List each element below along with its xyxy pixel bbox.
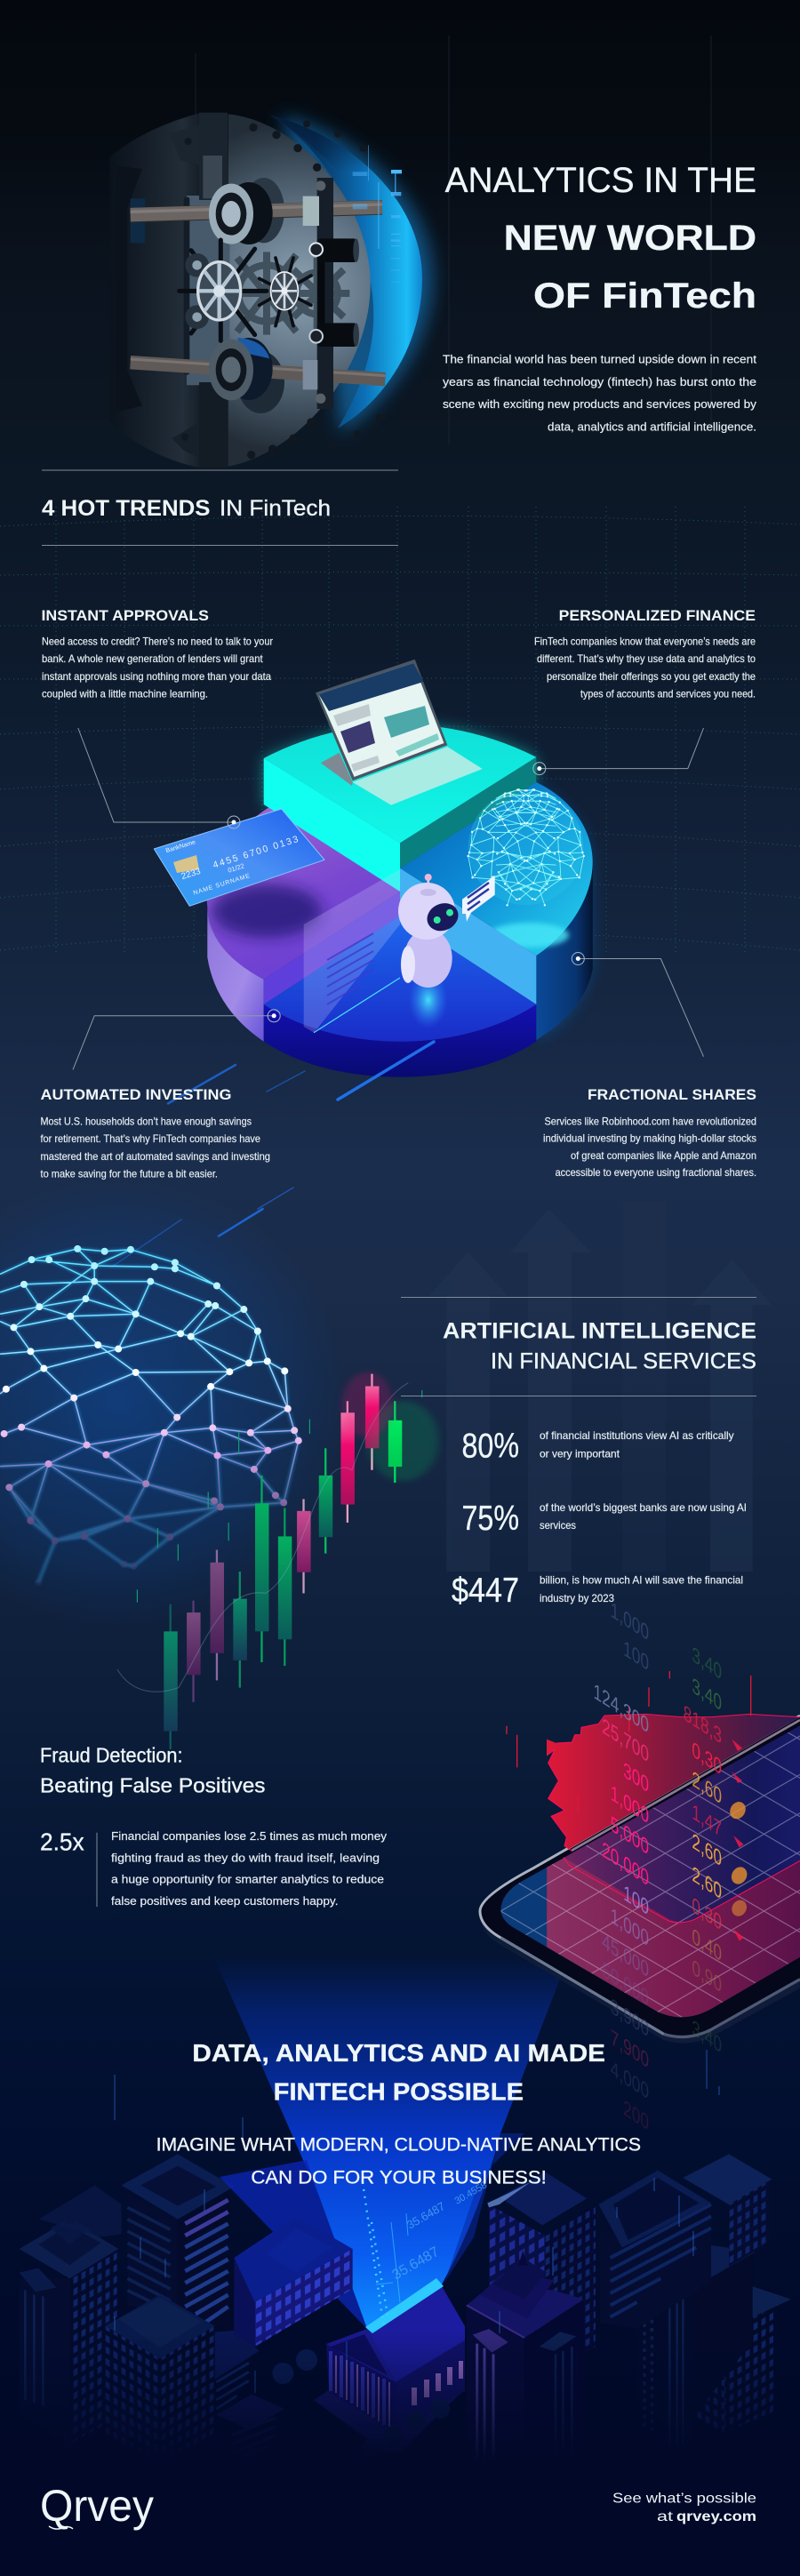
- heading: 4 hot trends: [42, 469, 398, 546]
- callout: personalized finance: [533, 728, 704, 775]
- floating beam figures: 35.6487: [404, 2199, 447, 2232]
- stat: 80%: of financial institutions view AI as critically: [540, 1429, 734, 1442]
- blue floor segment: [264, 916, 536, 1077]
- chart: candlesticks: [117, 1372, 439, 1749]
- icon: tablet: [316, 660, 483, 805]
- heading: artificial intelligence: IN FINANCIAL SERVICES: [491, 1349, 756, 1374]
- market numbers: 3,900: [611, 1993, 649, 2042]
- text block: personalized finance: [534, 607, 756, 700]
- icon: chat bubble: [462, 876, 495, 922]
- callout: instant approvals: [78, 728, 240, 828]
- footer call to action: See what’s possible: [612, 2491, 756, 2506]
- wedge of light: [220, 2160, 367, 2329]
- logo: Qrvey: Qrvey: [40, 2481, 154, 2531]
- text block: automated investing: for retirement. That’s why FinTech companies have: [41, 1132, 260, 1145]
- stat: $447: industry by 2023: [540, 1592, 614, 1604]
- closing headline: DATA, ANALYTICS AND AI MADE: [192, 2039, 605, 2067]
- stat: 75%: 75%: [462, 1500, 519, 1538]
- market numbers: 0,90: [692, 1955, 722, 1997]
- translucent panel: [304, 869, 400, 1033]
- candle 3: [210, 1550, 224, 1680]
- market numbers: 1,000: [611, 1902, 649, 1951]
- candle 4: [233, 1572, 247, 1688]
- market numbers: 3,40: [692, 2015, 722, 2058]
- stat: $447: $447: [452, 1572, 519, 1610]
- trees: [272, 2349, 402, 2459]
- candle 2: [187, 1601, 201, 1702]
- title: NEW WORLD: [504, 219, 756, 258]
- text block: personalized finance: PERSONALIZED FINANCE: [559, 607, 756, 624]
- market numbers: [594, 1596, 722, 2135]
- market numbers: 45,000: [602, 1928, 649, 1982]
- heading: 4 hot trends: 4 HOT TRENDS: [42, 496, 210, 521]
- candle 5: [255, 1476, 268, 1662]
- card text: [165, 834, 300, 897]
- market numbers: 5,000: [611, 1811, 649, 1860]
- bank: [314, 2278, 465, 2453]
- text block: fractional shares: Services like Robinhood.com have revolutionized: [544, 1115, 756, 1127]
- phone body: [482, 1723, 800, 2043]
- text block: instant approvals: Need access to credit? There’s no need to talk to your: [42, 635, 273, 647]
- stat: 80%: 80%: [462, 1428, 519, 1465]
- text block: automated investing: AUTOMATED INVESTING: [41, 1086, 231, 1103]
- buildings left: [20, 2154, 402, 2465]
- stat: 2.5x: Financial companies lose 2.5 times as much money: [111, 1829, 388, 1843]
- stat: 2.5x: a huge opportunity for smarter analytics to reduce: [111, 1873, 384, 1886]
- buildings right: [467, 2154, 791, 2483]
- intro paragraph: years as financial technology (fintech) has burst onto the: [443, 375, 756, 388]
- heading: artificial intelligence: ARTIFICIAL INTELLIGENCE: [443, 1319, 756, 1344]
- text block: automated investing: mastered the art of automated savings and investing: [41, 1150, 270, 1163]
- illustration: bank vault door: [109, 113, 433, 468]
- illustration: light beam: [213, 1956, 569, 2329]
- icon: data sphere: [468, 789, 584, 905]
- red data panel: [547, 1714, 800, 1849]
- footer call to action: [612, 2491, 756, 2524]
- intro paragraph: data, analytics and artificial intelligence.: [548, 420, 756, 434]
- stat: $447: billion, is how much AI will save the financial: [540, 1573, 743, 1586]
- floating beam figures: 35.6487: [389, 2244, 442, 2283]
- icon: credit card: [154, 809, 324, 906]
- text block: fractional shares: of great companies like Apple and Amazon: [571, 1149, 756, 1162]
- market numbers: 7,900: [611, 2024, 649, 2073]
- text block: instant approvals: INSTANT APPROVALS: [41, 607, 209, 624]
- stat: 2.5x: [40, 1828, 388, 1908]
- decorative arrows background: [428, 1202, 772, 1572]
- market numbers: 0,30: [692, 1892, 722, 1935]
- card text: 01/22: [227, 861, 245, 875]
- cyan segment: [400, 782, 593, 1040]
- stat: 80%: or very important: [540, 1447, 620, 1460]
- illustration: segmented isometric cylinder: [154, 660, 593, 1077]
- text block: personalized finance: personalize their offerings so you get exactly the: [547, 670, 756, 683]
- floating beam figures: [389, 2180, 489, 2283]
- text block: fractional shares: accessible to everyone using fractional shares.: [556, 1166, 756, 1179]
- title: OF FinTech: [533, 276, 756, 316]
- title: ANALYTICS IN THE: [445, 161, 756, 200]
- card text: 4455 6700 0133: [212, 834, 300, 871]
- market numbers: 1,000: [611, 1780, 649, 1828]
- market numbers: 818,3: [684, 1700, 722, 1748]
- candle 1: [164, 1604, 178, 1749]
- stat: $447: [452, 1572, 743, 1610]
- closing subheading: IMAGINE WHAT MODERN, CLOUD-NATIVE ANALYTICS: [156, 2135, 641, 2155]
- market numbers: 25,700: [602, 1713, 649, 1767]
- market numbers: 2,60: [692, 1766, 722, 1809]
- callout: fractional shares: [572, 953, 704, 1057]
- floating beam figures: 30.4558: [453, 2180, 489, 2207]
- closing subheading: CAN DO FOR YOUR BUSINESS!: [251, 2167, 547, 2188]
- intro paragraph: [443, 352, 757, 434]
- market numbers: 1,47: [692, 1799, 722, 1842]
- illustration: isometric city with bank: [0, 2039, 800, 2576]
- text block: automated investing: Most U.S. households don’t have enough savings: [41, 1115, 252, 1127]
- card text: 2233: [180, 867, 203, 882]
- blue streaks: [112, 1042, 434, 1267]
- footer call to action: qrvey.com: [676, 2509, 756, 2524]
- illustration: phone with market data: [478, 1604, 800, 2129]
- text block: personalized finance: types of accounts and services you need.: [580, 688, 756, 700]
- card text: NAME SURNAME: [193, 873, 251, 897]
- text block: automated investing: to make saving for the future a bit easier.: [41, 1168, 218, 1180]
- text block: personalized finance: FinTech companies know that everyone’s needs are: [534, 635, 756, 647]
- market numbers: 4,000: [611, 2055, 649, 2104]
- purple segment: [207, 807, 400, 1042]
- heading: artificial intelligence: [401, 1297, 756, 1396]
- market numbers: 100: [623, 1636, 649, 1676]
- title: [445, 161, 756, 316]
- stat: 2.5x: false positives and keep customers happy.: [111, 1894, 338, 1908]
- intro paragraph: The financial world has been turned upside down in recent: [443, 352, 756, 366]
- market numbers: 1,000: [611, 1596, 649, 1645]
- candle 8: [319, 1448, 332, 1554]
- card text: BankName: [165, 839, 196, 854]
- market numbers: 0,40: [692, 1924, 722, 1966]
- market numbers: 300: [623, 1757, 649, 1797]
- data in beam: [363, 2182, 408, 2329]
- market numbers: 3,40: [692, 1673, 722, 1716]
- stat: 75%: services: [540, 1519, 576, 1532]
- stat: 2.5x: 2.5x: [40, 1828, 84, 1856]
- candle 7: [297, 1499, 311, 1593]
- text block: instant approvals: instant approvals using nothing more than your data: [42, 670, 271, 683]
- closing headline: FINTECH POSSIBLE: [274, 2078, 524, 2105]
- text block: personalized finance: different. That’s why they use data and analytics to: [537, 652, 756, 665]
- text block: fractional shares: FRACTIONAL SHARES: [588, 1086, 756, 1103]
- market numbers: 124,300: [594, 1678, 649, 1738]
- text block: fraud detection: Fraud Detection:: [40, 1744, 183, 1767]
- text block: instant approvals: coupled with a little machine learning.: [42, 688, 208, 700]
- intro paragraph: scene with exciting new products and services powered by: [443, 397, 757, 411]
- heading: 4 hot trends: IN FinTech: [220, 496, 331, 521]
- blue building: [234, 2216, 353, 2347]
- market numbers: 200: [623, 2095, 649, 2135]
- market numbers: 20,000: [602, 1836, 649, 1891]
- closing subheading: [156, 2135, 641, 2188]
- market numbers: 2,60: [692, 1861, 722, 1904]
- stat: 75%: of the world’s biggest banks are now using AI: [540, 1501, 747, 1514]
- stat: 2.5x: fighting fraud as they do with fraud itself, leaving: [111, 1851, 380, 1864]
- text block: fractional shares: individual investing by making high-dollar stocks: [543, 1132, 756, 1145]
- candle 10: [365, 1374, 379, 1470]
- text block: instant approvals: [41, 607, 273, 700]
- market numbers: 50,000: [602, 1956, 649, 2011]
- text block: automated investing: [41, 1086, 270, 1180]
- candle 9: [340, 1401, 355, 1523]
- text block: fractional shares: [543, 1086, 756, 1179]
- candle 11: [388, 1401, 402, 1483]
- rain lines: [115, 2050, 719, 2393]
- candle 6: [278, 1508, 292, 1666]
- text block: fraud detection: [40, 1744, 265, 1797]
- callout: automated investing: [73, 1010, 280, 1069]
- market numbers: 3,40: [692, 1642, 722, 1684]
- footer call to action: at: [657, 2509, 674, 2524]
- market numbers: 2,60: [692, 1828, 722, 1871]
- illustration: network globe: [0, 1176, 347, 1626]
- market numbers: 100: [623, 1880, 649, 1920]
- text block: fraud detection: Beating False Positives: [40, 1774, 265, 1797]
- stat: 75%: [462, 1500, 747, 1538]
- market numbers: 0,30: [692, 1737, 722, 1780]
- stat: 80%: [462, 1428, 734, 1465]
- text block: instant approvals: bank. A whole new generation of lenders will grant: [42, 652, 263, 665]
- closing headline: [192, 2039, 605, 2105]
- teal segment: [264, 724, 536, 892]
- icon: robot: [398, 874, 463, 1028]
